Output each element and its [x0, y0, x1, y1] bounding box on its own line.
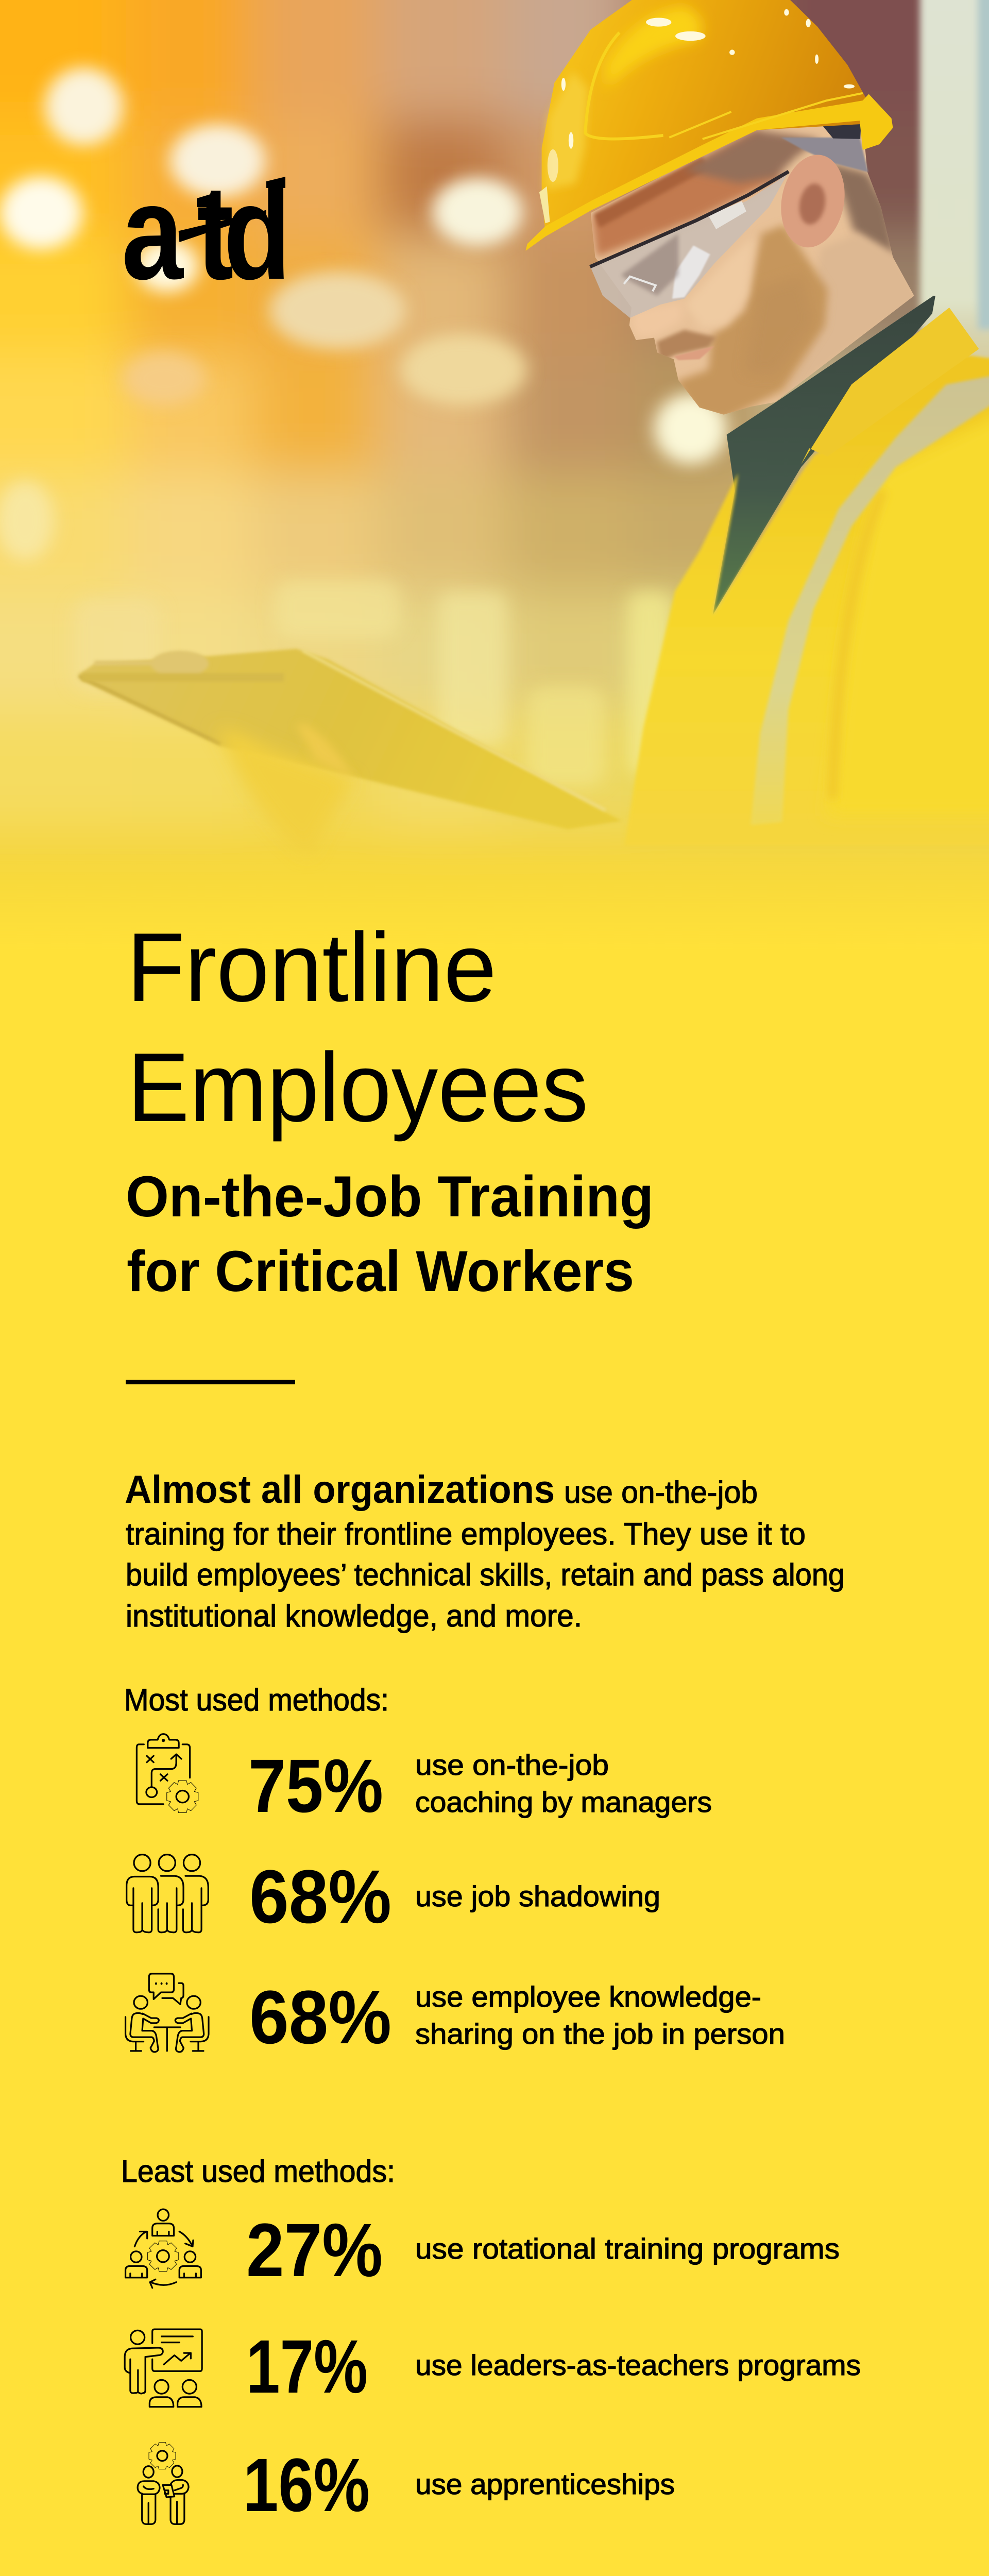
icon: two people under gear — [138, 2443, 189, 2524]
icon: two people talking at table — [126, 1974, 209, 2052]
subtitle — [126, 1164, 654, 1303]
intro text — [125, 1468, 845, 1633]
blurred factory background — [0, 0, 989, 1006]
fade into page colour — [0, 845, 989, 951]
neck tone — [789, 231, 914, 390]
stat: 17% — [246, 2325, 368, 2409]
intro text: institutional knowledge, and more. — [126, 1599, 582, 1633]
neck and face — [590, 124, 914, 415]
lips — [674, 346, 714, 360]
intro text: training for their frontline employees. They use it to — [126, 1517, 806, 1551]
ear — [774, 150, 852, 252]
row: 75% coaching by managers — [137, 1734, 712, 1828]
label: use job shadowing — [415, 1880, 660, 1912]
stat: 27% — [246, 2208, 383, 2293]
row: 68% job shadowing — [127, 1855, 660, 1939]
hero photo: worker reading clipboard — [0, 0, 989, 880]
logo: atd: t — [197, 157, 234, 308]
safety glasses — [590, 172, 789, 318]
row: 27% rotational training — [126, 2208, 840, 2293]
hard hat — [526, 0, 893, 251]
intro text: build employees’ technical skills, retain and pass along — [126, 1557, 845, 1592]
reflective stripe — [751, 372, 989, 825]
title — [127, 913, 588, 1142]
icon: presenter at board — [125, 2329, 202, 2407]
cheek — [691, 247, 754, 330]
jacket body — [624, 355, 989, 846]
hat ridges — [585, 32, 663, 139]
page colour below hero — [0, 951, 989, 1105]
intro text: Almost all organizations — [125, 1468, 555, 1512]
pale pillar at right — [920, 0, 989, 433]
hand — [217, 729, 353, 858]
intro text: use on-the-job — [564, 1475, 758, 1510]
bokeh lights — [0, 67, 727, 787]
label: use rotational training programs — [415, 2232, 840, 2265]
jacket — [624, 296, 989, 846]
nose — [632, 301, 683, 338]
divider rule — [126, 1380, 295, 1384]
hat highlights — [548, 9, 855, 182]
collar — [801, 308, 979, 464]
hair at temple and back — [685, 130, 821, 183]
headband — [781, 138, 868, 172]
row: 16% apprenticeships — [138, 2443, 675, 2528]
clipboard board — [79, 649, 621, 829]
label: use apprenticeships — [415, 2468, 675, 2500]
stat: 68% — [249, 1975, 391, 2060]
title: Employees — [127, 1033, 588, 1142]
logo: atd — [122, 157, 291, 308]
icon: rotating people around gear — [126, 2209, 201, 2288]
stat: 68% — [249, 1855, 391, 1939]
icon: clipboard with plan and gear — [137, 1734, 198, 1812]
forehead shading — [592, 130, 781, 257]
mustache — [657, 330, 716, 362]
subtitle: On-the-Job Training — [126, 1164, 654, 1229]
label — [415, 1980, 785, 2050]
heading: least used methods: Least used methods: — [121, 2154, 395, 2189]
label — [415, 1749, 712, 1818]
heading: most used methods: Most used methods: — [124, 1683, 389, 1717]
logo: atd: a — [122, 157, 184, 308]
stat: 16% — [243, 2443, 370, 2528]
subtitle: for Critical Workers — [127, 1239, 634, 1303]
label: use leaders-as-teachers programs — [415, 2349, 861, 2381]
row: 17% leaders as teachers — [125, 2325, 861, 2409]
clipboard clip — [82, 651, 284, 681]
stat: 75% — [248, 1744, 383, 1828]
clipboard and hands — [79, 649, 621, 858]
shirt — [713, 296, 935, 615]
label: use employee knowledge- — [415, 1980, 761, 2013]
beard — [675, 225, 828, 420]
logo: atd: d — [224, 157, 291, 308]
brim — [526, 94, 893, 251]
label: sharing on the job in person — [415, 2018, 785, 2050]
title: Frontline — [127, 913, 497, 1022]
icon: three people — [127, 1855, 208, 1933]
label: coaching by managers — [415, 1786, 712, 1818]
label: use on-the-job — [415, 1749, 609, 1781]
row: 68% knowledge sharing — [126, 1974, 785, 2060]
